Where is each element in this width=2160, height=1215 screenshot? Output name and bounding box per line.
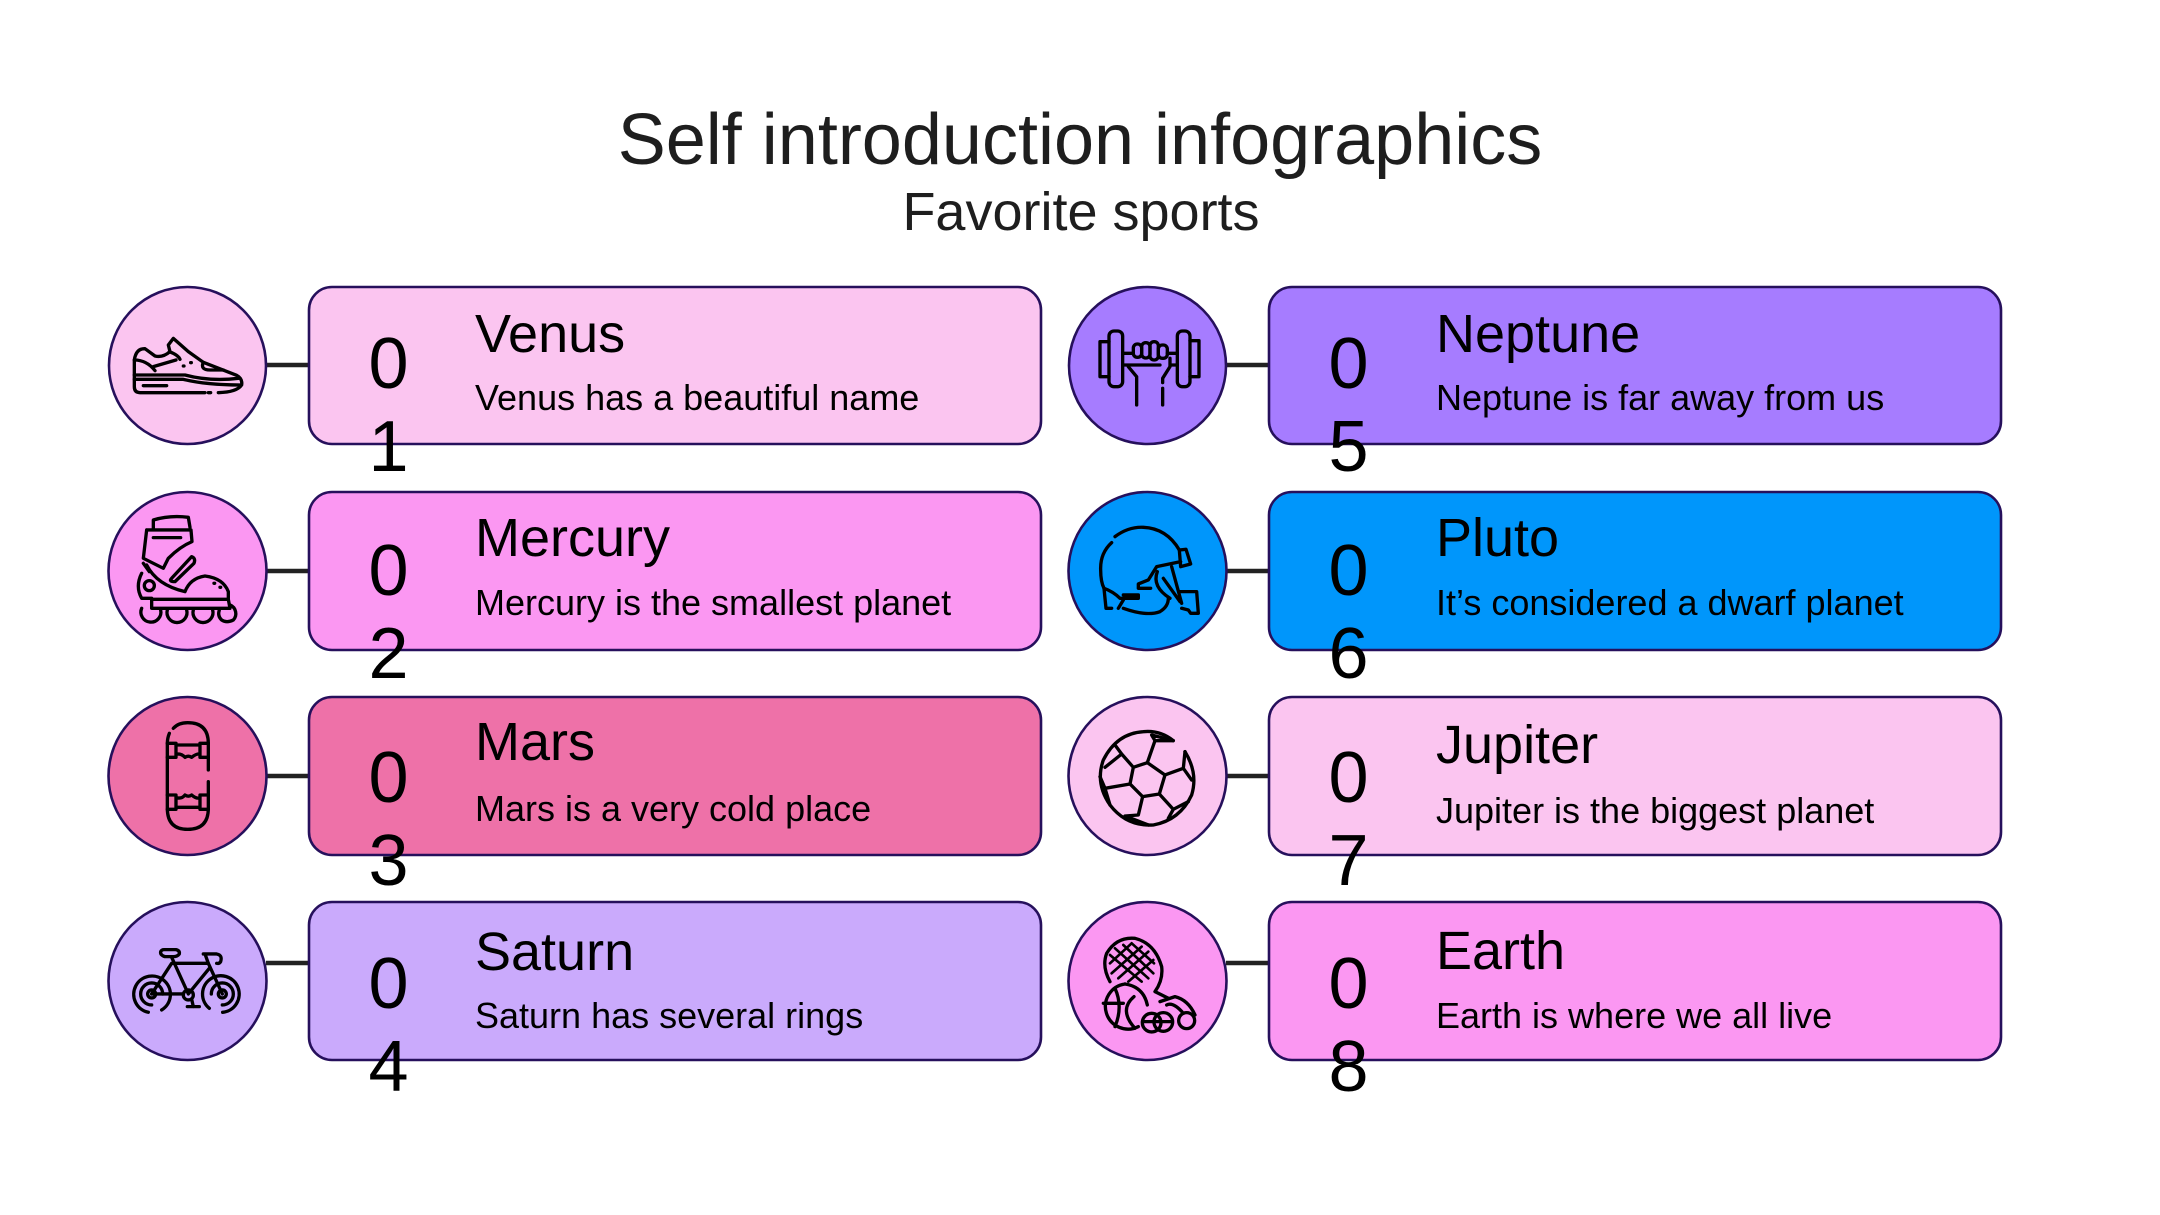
item 07: Jupiter bbox=[1068, 697, 2001, 901]
connector 01 bbox=[266, 363, 309, 367]
number 06: 0 bbox=[1328, 531, 1369, 611]
title: Self introduction infographics bbox=[618, 100, 1542, 180]
icon circle 04 bbox=[108, 902, 266, 1060]
heading Venus: Venus bbox=[475, 304, 625, 364]
icon: football helmet bbox=[1101, 527, 1198, 614]
item 03: Mars bbox=[108, 697, 1041, 901]
heading Mercury: Mercury bbox=[475, 508, 670, 568]
number 05: 0 bbox=[1328, 324, 1369, 404]
heading Saturn: Saturn bbox=[475, 922, 634, 982]
card 04 bbox=[309, 902, 1041, 1060]
card 02 bbox=[309, 492, 1041, 650]
item 01: Venus bbox=[109, 287, 1041, 487]
icon: dumbbell and fist bbox=[1100, 331, 1199, 405]
icon circle 08 bbox=[1068, 902, 1226, 1060]
number 02: 0 bbox=[368, 531, 409, 611]
item 05: Neptune bbox=[1069, 287, 2001, 487]
description Earth: Earth is where we all live bbox=[1436, 995, 1832, 1036]
number 05: 5 bbox=[1328, 407, 1369, 487]
connector 04 bbox=[266, 961, 309, 965]
connector 08 bbox=[1226, 961, 1269, 965]
icon circle 01 bbox=[109, 287, 266, 444]
description Neptune: Neptune is far away from us bbox=[1436, 377, 1884, 418]
card 07 bbox=[1269, 697, 2001, 855]
number 01: 1 bbox=[368, 407, 409, 487]
icon: roller skate bbox=[138, 517, 236, 623]
icon circle 06 bbox=[1068, 492, 1226, 650]
number 08: 0 bbox=[1328, 944, 1369, 1024]
description Mercury: Mercury is the smallest planet bbox=[475, 582, 951, 623]
number 07: 7 bbox=[1328, 821, 1369, 901]
number 01: 0 bbox=[368, 324, 409, 404]
connector 05 bbox=[1226, 363, 1269, 367]
card 08 bbox=[1269, 902, 2001, 1060]
item 08: Earth bbox=[1068, 902, 2001, 1107]
connector 06 bbox=[1226, 569, 1269, 573]
number 04: 4 bbox=[368, 1027, 409, 1107]
icon: bicycle bbox=[134, 950, 239, 1012]
icon circle 02 bbox=[108, 492, 266, 650]
subtitle: Favorite sports bbox=[902, 182, 1260, 242]
item 04: Saturn bbox=[108, 902, 1041, 1107]
icon: sneaker bbox=[134, 338, 242, 393]
number 02: 2 bbox=[368, 614, 409, 694]
icon: racket and balls bbox=[1103, 938, 1195, 1032]
connector 03 bbox=[266, 774, 309, 778]
number 03: 0 bbox=[368, 738, 409, 818]
heading Neptune: Neptune bbox=[1436, 304, 1640, 364]
number 07: 0 bbox=[1328, 738, 1369, 818]
heading Jupiter: Jupiter bbox=[1436, 715, 1598, 775]
card 03 bbox=[309, 697, 1041, 855]
heading Pluto: Pluto bbox=[1436, 508, 1559, 568]
icon circle 07 bbox=[1068, 697, 1226, 855]
description Mars: Mars is a very cold place bbox=[475, 788, 871, 829]
item 06: Pluto bbox=[1068, 492, 2001, 694]
number 04: 0 bbox=[368, 944, 409, 1024]
item 02: Mercury bbox=[108, 492, 1041, 694]
icon: soccer ball bbox=[1100, 731, 1194, 825]
description Venus: Venus has a beautiful name bbox=[475, 377, 919, 418]
number 08: 8 bbox=[1328, 1027, 1369, 1107]
connector 02 bbox=[266, 569, 309, 573]
description Pluto: It’s considered a dwarf planet bbox=[1436, 582, 1904, 623]
connector 07 bbox=[1226, 774, 1269, 778]
icon: skateboard bbox=[167, 723, 208, 829]
number 06: 6 bbox=[1328, 614, 1369, 694]
icon circle 05 bbox=[1069, 287, 1226, 444]
description Saturn: Saturn has several rings bbox=[475, 995, 863, 1036]
heading Mars: Mars bbox=[475, 712, 595, 772]
number 03: 3 bbox=[368, 821, 409, 901]
description Jupiter: Jupiter is the biggest planet bbox=[1436, 790, 1874, 831]
card 05 bbox=[1269, 287, 2001, 444]
card 06 bbox=[1269, 492, 2001, 650]
icon circle 03 bbox=[108, 697, 266, 855]
card 01 bbox=[309, 287, 1041, 444]
heading Earth: Earth bbox=[1436, 921, 1565, 981]
